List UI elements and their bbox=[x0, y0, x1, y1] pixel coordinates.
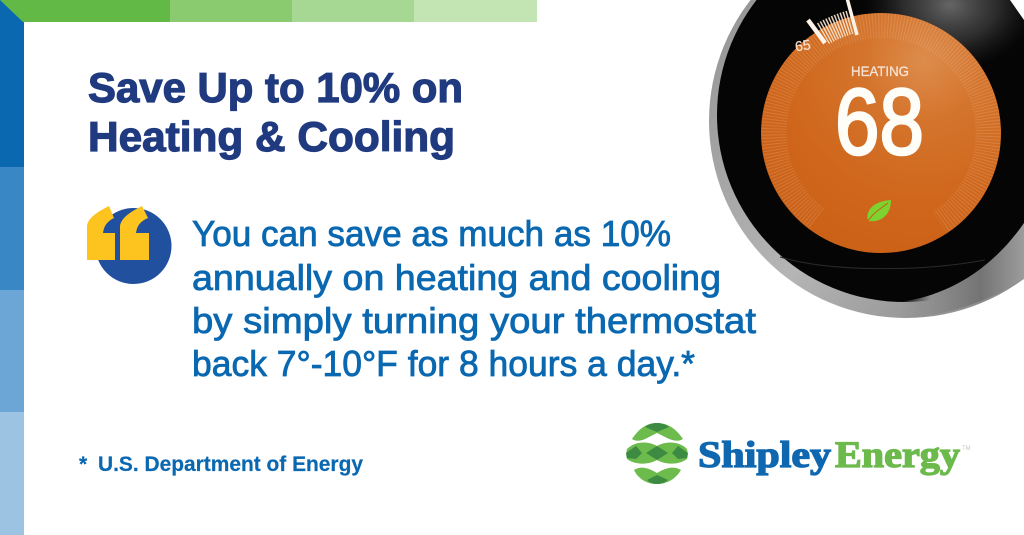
footnote: U.S. Department of Energy bbox=[98, 453, 363, 476]
thermostat orange face bbox=[761, 13, 1001, 253]
icon: quotation mark bbox=[87, 206, 172, 284]
logo wordmark bbox=[698, 435, 961, 476]
thermostat ticks bbox=[774, 26, 988, 222]
thermostat outer ring bbox=[709, 0, 1024, 318]
body text: by simply turning your thermostat bbox=[192, 300, 756, 341]
logo wordmark: Energy bbox=[835, 435, 961, 476]
title: Save Up to 10% on bbox=[88, 64, 463, 111]
left blue stripe bbox=[0, 0, 24, 535]
title: Heating & Cooling bbox=[88, 113, 455, 160]
thermostat corner bbox=[1010, 0, 1024, 20]
thermostat black bezel bbox=[717, 0, 1024, 302]
thermostat lower right metal bbox=[900, 223, 1024, 318]
logo globe bbox=[626, 423, 688, 484]
thermostat marker 65 bbox=[808, 20, 825, 43]
thermostat label heating: HEATING bbox=[851, 63, 909, 79]
thermostat active ticks bbox=[823, 22, 851, 34]
body text bbox=[192, 213, 756, 384]
title bbox=[88, 64, 463, 160]
logo wordmark: Shipley bbox=[698, 435, 832, 476]
thermostat bezel sheen bbox=[876, 0, 1022, 58]
footnote: * bbox=[79, 453, 88, 476]
body text: back 7°-10°F for 8 hours a day.* bbox=[192, 343, 695, 384]
logo: Shipley Energy bbox=[626, 423, 971, 484]
thermostat temperature: 68 bbox=[835, 69, 924, 174]
logo trademark: TM bbox=[962, 446, 971, 452]
thermostat bbox=[709, 0, 1024, 318]
body text: annually on heating and cooling bbox=[192, 257, 721, 298]
top green stripe bbox=[0, 0, 537, 22]
body text: You can save as much as 10% bbox=[192, 213, 671, 254]
thermostat reflection line bbox=[780, 257, 985, 269]
thermostat label 65: 65 bbox=[794, 36, 812, 54]
icon: leaf bbox=[867, 200, 891, 221]
thermostat marker 68 bbox=[847, 0, 857, 35]
